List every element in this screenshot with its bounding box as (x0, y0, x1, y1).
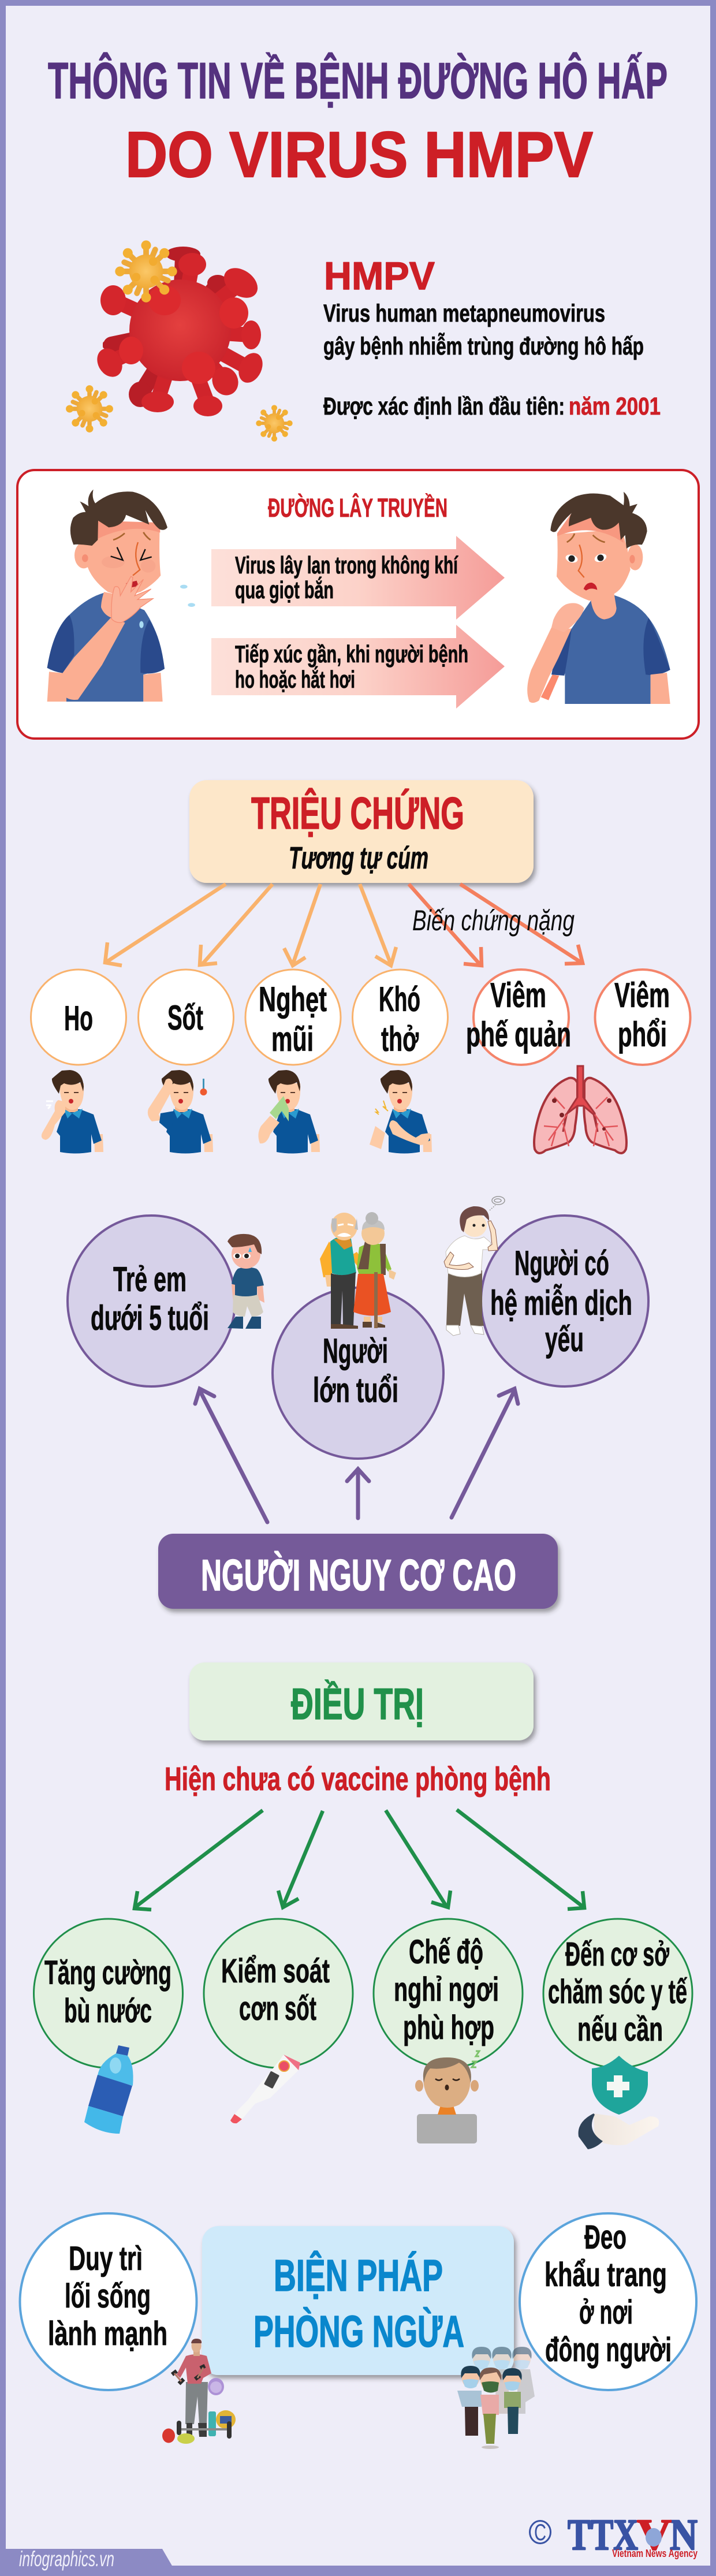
circle: pneumonia (595, 970, 691, 1065)
year 2001: năm 2001 (569, 393, 661, 420)
footer (6, 2511, 698, 2571)
circle: short of breath: thở (381, 1020, 419, 1058)
circle: bronchitis: Viêm (490, 976, 546, 1015)
heading box: high-risk people (158, 1534, 558, 1609)
heading box: treatment: ĐIỀU TRỊ (291, 1680, 424, 1729)
arrows: common symptoms (105, 884, 396, 965)
first identified label: Được xác định lần đầu tiên: (323, 393, 565, 420)
icon: yellow virus left (66, 385, 113, 433)
bubble: fever control: Kiểm soát (221, 1952, 330, 1990)
heading box: symptoms (189, 780, 534, 883)
icon: virus cluster (66, 240, 293, 442)
airborne text: qua giọt bắn (235, 576, 334, 603)
bubble: healthy lifestyle: lành mạnh (48, 2315, 167, 2353)
close contact text: Tiếp xúc gần, khi người bệnh (235, 640, 468, 668)
arrows: risk groups (195, 1389, 518, 1522)
note: no vaccine: Hiện chưa có vaccine phòng bệnh (165, 1761, 551, 1798)
bubble: wear mask: Đeo (584, 2219, 626, 2256)
bubble: hydration (33, 1919, 182, 2068)
icon: coughing boy (527, 492, 670, 704)
section: high-risk groups (68, 1196, 648, 1609)
close contact text: ho hoặc hắt hơi (235, 665, 355, 693)
text block: HMPV intro (323, 254, 661, 420)
bubble: wear mask (520, 2213, 696, 2390)
bubble: medical care (543, 1919, 692, 2068)
icon: water bottle (84, 2045, 133, 2134)
bubble: wear mask: ở nơi (579, 2294, 633, 2331)
icon: sneezing boy (47, 490, 195, 702)
icon: thermometer (230, 2055, 300, 2123)
bubble: healthy lifestyle (20, 2213, 196, 2390)
circle: pneumonia: Viêm (614, 976, 670, 1015)
icon: person short of breath (370, 1070, 432, 1154)
copyright mark: C (534, 2520, 546, 2545)
icon: large red virus (92, 247, 267, 416)
bubble: rest: Chế độ (409, 1933, 483, 1971)
circle: cough (31, 970, 126, 1065)
logo: TTXVN: TTX (568, 2511, 638, 2559)
bubble: weak immune system (481, 1216, 648, 1386)
icon: masked crowd (457, 2347, 535, 2449)
circle: short of breath (352, 970, 448, 1065)
heading box: prevention: BIỆN PHÁP (274, 2250, 443, 2301)
circle: stuffy nose: Nghẹt (259, 980, 327, 1019)
logo: TTXVN: N (670, 2511, 698, 2559)
bubble: hydration: bù nước (64, 1992, 152, 2030)
label: severe complications: Biến chứng nặng (412, 904, 575, 937)
icon: orange virus right (256, 405, 293, 442)
virus name: Virus human metapneumovirus (323, 300, 605, 327)
bubble: elderly: Người (323, 1332, 388, 1370)
section: prevention (20, 2213, 696, 2449)
circle: stuffy nose (245, 970, 341, 1065)
circle: pneumonia: phổi (618, 1015, 667, 1054)
icon: resting person (415, 2051, 479, 2143)
circle: bronchitis (466, 970, 571, 1065)
bubble: children under 5 (68, 1216, 235, 1386)
bubble: healthy lifestyle: lối sống (65, 2277, 151, 2315)
heading: HMPV: HMPV (324, 254, 435, 298)
icon: sick person (444, 1196, 505, 1336)
heading: transmission: ĐƯỜNG LÂY TRUYỀN (268, 493, 448, 523)
circle: stuffy nose: mũi (271, 1020, 314, 1058)
arrow: airborne (211, 536, 505, 620)
circle: cough: Ho (64, 999, 93, 1038)
icon: lungs (534, 1066, 626, 1153)
bubble: hydration: Tăng cường (44, 1954, 171, 1992)
bubble: children under 5: dưới 5 tuổi (91, 1299, 209, 1337)
bubble: fever control (204, 1919, 353, 2068)
arrows: treatment (135, 1810, 584, 1910)
bubble: medical care: nếu cần (577, 2011, 663, 2048)
heading box: prevention (202, 2226, 514, 2375)
heading box: prevention: PHÒNG NGỪA (253, 2307, 464, 2357)
icon: person with fever (148, 1070, 213, 1154)
heading box: treatment (189, 1662, 534, 1740)
icon: exercise person (162, 2339, 236, 2444)
panel: transmission (17, 470, 699, 739)
icon: person coughing (42, 1070, 103, 1154)
circle: short of breath: Khó (379, 980, 420, 1019)
bubble: fever control: cơn sốt (239, 1990, 316, 2027)
subheading: flu-like: Tương tự cúm (289, 841, 428, 875)
icon: elderly couple (320, 1212, 396, 1329)
circle: bronchitis: phế quản (466, 1015, 571, 1054)
bubble: elderly: lớn tuổi (313, 1371, 398, 1410)
section: treatment (33, 1662, 692, 2149)
bubble: weak immune system: yếu (545, 1320, 584, 1359)
bubble: rest: phù hợp (403, 2009, 494, 2046)
heading box: high-risk people: NGƯỜI NGUY CƠ CAO (201, 1551, 516, 1600)
icon: yellow virus top (115, 240, 177, 303)
circle: fever: Sốt (167, 998, 203, 1037)
bubble: wear mask: khẩu trang (545, 2256, 667, 2294)
bubble: weak immune system: Người có (514, 1244, 609, 1283)
arrow: close contact (211, 625, 505, 709)
bubble: healthy lifestyle: Duy trì (69, 2240, 143, 2277)
icon: person blowing nose (258, 1070, 320, 1154)
logo: TTXVN (568, 2511, 698, 2559)
title (48, 52, 667, 191)
airborne text (235, 551, 458, 603)
site tab: infographics.vn (19, 2547, 114, 2571)
bubble: elderly (273, 1288, 443, 1459)
circle: fever (139, 970, 233, 1065)
bubble: weak immune system: hệ miễn dịch (490, 1284, 632, 1322)
section: symptoms (31, 780, 691, 1154)
bubble: children under 5: Trẻ em (113, 1260, 187, 1299)
heading: symptoms: TRIỆU CHỨNG (251, 788, 464, 838)
arrows: severe complications (409, 884, 583, 965)
logo: TTXVN: V (637, 2511, 672, 2559)
bubble: rest: nghỉ ngơi (394, 1971, 499, 2008)
close contact text (235, 640, 468, 693)
icon: shield and hand (579, 2056, 659, 2149)
icon: child (228, 1234, 264, 1329)
airborne text: Virus lây lan trong không khí (235, 551, 458, 579)
title line 2: DO VIRUS HMPV (125, 119, 593, 191)
bubble: rest (374, 1919, 523, 2068)
